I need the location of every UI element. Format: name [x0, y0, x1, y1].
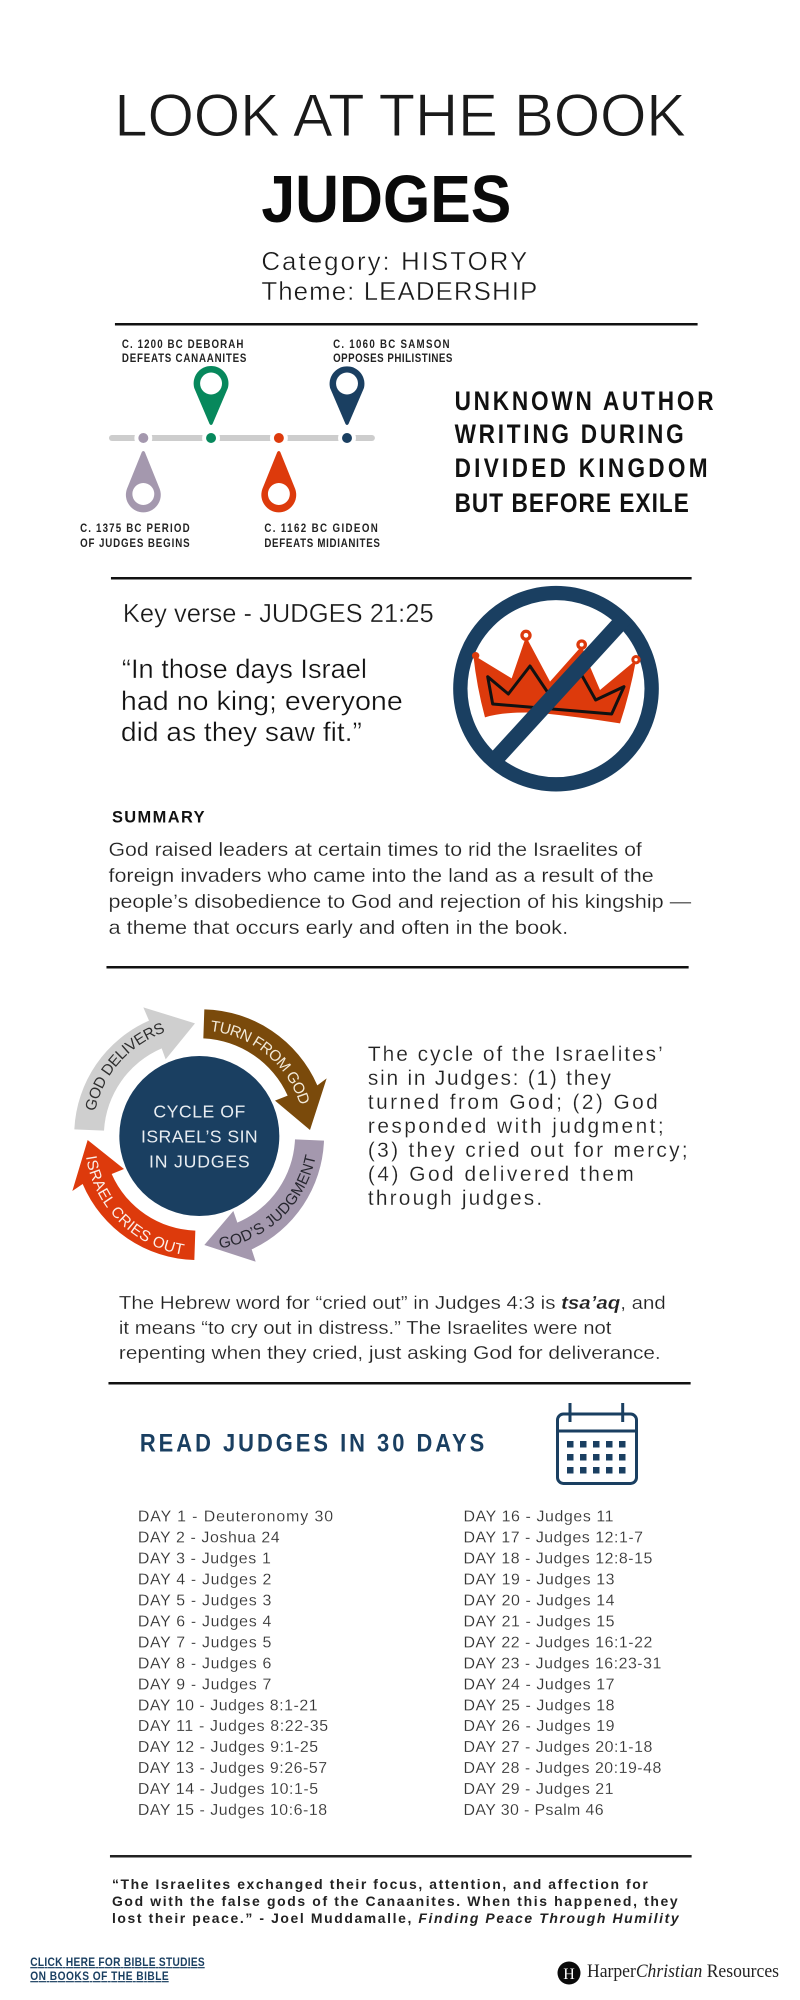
- label: 1060 BC: C. 1060 BC SAMSON: [333, 338, 450, 351]
- list: reading plan days 1-15: DAY 2 - Joshua 24: [138, 1530, 280, 1547]
- arrow: God delivers: GOD DELIVERS: [86, 1023, 164, 1110]
- text: author and date: [455, 386, 714, 519]
- text: Hebrew word note: The Hebrew word for “cried out” in Judges 4:3 is tsa’aq , and: [119, 1292, 666, 1313]
- list: reading plan days 16-30: DAY 23 - Judges 16:23-31: [464, 1655, 661, 1672]
- label: 1162 BC: [264, 522, 380, 550]
- arrow: God's judgment: [204, 1139, 324, 1262]
- list: reading plan days 1-15: DAY 4 - Judges 2: [138, 1572, 271, 1589]
- text: verse quote: did as they saw fit.”: [121, 717, 362, 747]
- logo: HarperChristian Resources: HarperChristian Resources: [587, 1961, 779, 1982]
- list: reading plan days 1-15: DAY 9 - Judges 7: [138, 1676, 271, 1693]
- logo: HarperChristian Resources: H: [563, 1966, 575, 1983]
- list: reading plan days 16-30: DAY 20 - Judges 14: [464, 1592, 615, 1610]
- list: reading plan days 16-30: DAY 17 - Judges 12:1-7: [464, 1530, 643, 1547]
- arrow: God delivers: [74, 1008, 195, 1131]
- list: reading plan days 1-15: DAY 13 - Judges 9:26-57: [138, 1760, 327, 1777]
- center circle: ISRAEL’S SIN: [141, 1127, 258, 1147]
- label: 1375 BC: [80, 522, 190, 550]
- icon: purple pin: [126, 451, 161, 512]
- text: Hebrew word note: it means “to cry out in distress.” The Israelites were not: [119, 1317, 611, 1338]
- timeline bar: [112, 429, 372, 447]
- list: reading plan days 1-15: DAY 5 - Judges 3: [138, 1592, 271, 1610]
- label: 1162 BC: DEFEATS MIDIANITES: [264, 537, 380, 550]
- text: summary body: God raised leaders at certain times to rid the Israelites of: [108, 840, 643, 861]
- list: reading plan days 1-15: DAY 12 - Judges 9:1-25: [138, 1739, 318, 1756]
- center circle: IN JUDGES: [149, 1152, 250, 1172]
- text: cycle description: (3) they cried out for mercy;: [368, 1139, 688, 1162]
- arrow: Israel cries out: ISRAEL CRIES OUT: [86, 1156, 185, 1254]
- center circle: CYCLE OF: [153, 1102, 246, 1122]
- label: 1200 BC: C. 1200 BC DEBORAH: [122, 338, 243, 351]
- panel: timeline: [80, 338, 452, 550]
- text: Hebrew word note: [119, 1292, 666, 1363]
- list: reading plan days 16-30: DAY 18 - Judges 12:8-15: [464, 1551, 653, 1568]
- text: closing quote: lost their peace.” - Joel Muddamalle, Finding Peace Through Humility: [112, 1910, 680, 1926]
- text: verse quote: [121, 654, 403, 747]
- list: reading plan days 1-15: DAY 11 - Judges 8:22-35: [138, 1718, 328, 1735]
- text: category and theme: [261, 248, 537, 306]
- text: closing quote: “The Israelites exchanged their focus, attention, and affection for: [112, 1876, 648, 1892]
- title: look at the book: LOOK AT THE BOOK: [114, 82, 686, 149]
- icon: navy pin: [330, 366, 364, 425]
- list: reading plan days 16-30: [464, 1509, 661, 1819]
- list: reading plan days 1-15: DAY 3 - Judges 1: [138, 1551, 271, 1568]
- text: author and date: WRITING DURING: [455, 419, 684, 450]
- list: reading plan days 16-30: DAY 28 - Judges 20:19-48: [464, 1760, 661, 1777]
- icon: crossed-out crown: [460, 593, 652, 784]
- heading: key verse: Key verse - JUDGES 21:25: [123, 600, 434, 628]
- text: summary body: foreign invaders who came into the land as a result of the: [108, 866, 654, 887]
- list: reading plan days 1-15: DAY 6 - Judges 4: [138, 1613, 271, 1631]
- heading: summary: SUMMARY: [112, 809, 205, 827]
- list: reading plan days 1-15: DAY 10 - Judges 8:1-21: [138, 1697, 318, 1714]
- heading: read Judges in 30 days: READ JUDGES IN 30 DAYS: [140, 1429, 484, 1457]
- list: reading plan days 16-30: DAY 25 - Judges 18: [464, 1697, 615, 1714]
- label: 1375 BC: OF JUDGES BEGINS: [80, 537, 190, 550]
- arrow: God's judgment: GOD’S JUDGMENT: [220, 1154, 315, 1248]
- list: reading plan days 16-30: DAY 30 - Psalm 46: [464, 1802, 604, 1819]
- text: author and date: BUT BEFORE EXILE: [455, 488, 689, 519]
- heading: judges: JUDGES: [261, 162, 511, 237]
- text: cycle description: The cycle of the Israelites’: [368, 1043, 663, 1066]
- list: reading plan days 16-30: DAY 29 - Judges 21: [464, 1781, 614, 1798]
- text: closing quote: God with the false gods of the Canaanites. When this happened, they: [112, 1893, 678, 1909]
- label: 1200 BC: [122, 338, 246, 365]
- label: 1200 BC: DEFEATS CANAANITES: [122, 352, 246, 365]
- list: reading plan days 16-30: DAY 22 - Judges 16:1-22: [464, 1634, 653, 1651]
- text: verse quote: had no king; everyone: [121, 686, 403, 716]
- text: cycle description: (4) God delivered them: [368, 1163, 634, 1186]
- list: reading plan days 16-30: DAY 27 - Judges 20:1-18: [464, 1739, 653, 1756]
- chart: cycle of Israel's sin: [72, 1008, 327, 1262]
- text: summary body: people’s disobedience to God and rejection of his kingship —: [108, 892, 691, 913]
- link: Bible studies: [30, 1956, 205, 1983]
- icon: orange pin: [261, 451, 296, 512]
- label: 1375 BC: C. 1375 BC PERIOD: [80, 522, 190, 535]
- label: 1162 BC: C. 1162 BC GIDEON: [264, 522, 378, 535]
- arrow: turn from God: TURN FROM GOD: [212, 1020, 309, 1104]
- text: verse quote: “In those days Israel: [122, 654, 367, 684]
- list: reading plan days 16-30: DAY 19 - Judges 13: [464, 1572, 615, 1589]
- list: reading plan days 16-30: DAY 26 - Judges 19: [464, 1718, 615, 1735]
- text: Hebrew word note: repenting when they cried, just asking God for deliverance.: [119, 1342, 661, 1363]
- text: cycle description: sin in Judges: (1) they: [368, 1067, 611, 1090]
- text: author and date: UNKNOWN AUTHOR: [455, 386, 714, 417]
- list: reading plan days 1-15: DAY 1 - Deuteronomy 30: [138, 1509, 333, 1526]
- text: author and date: DIVIDED KINGDOM: [455, 453, 708, 484]
- link: Bible studies: ON BOOKS OF THE BIBLE: [30, 1970, 169, 1983]
- list: reading plan days 1-15: DAY 15 - Judges 10:6-18: [138, 1802, 327, 1819]
- link: Bible studies: CLICK HERE FOR BIBLE STUDIES: [30, 1956, 205, 1969]
- list: reading plan days 1-15: [138, 1509, 333, 1819]
- icon: green pin: [194, 366, 228, 425]
- list: reading plan days 16-30: DAY 24 - Judges 17: [464, 1676, 615, 1693]
- center circle: [119, 1056, 279, 1216]
- text: category and theme: Theme: LEADERSHIP: [261, 278, 537, 306]
- text: category and theme: Category: HISTORY: [261, 248, 527, 276]
- text: cycle description: responded with judgment;: [368, 1115, 664, 1138]
- text: cycle description: [368, 1043, 688, 1210]
- list: reading plan days 16-30: DAY 16 - Judges 11: [464, 1509, 614, 1526]
- icon: calendar: [557, 1403, 637, 1484]
- label: 1060 BC: [333, 338, 452, 365]
- text: cycle description: through judges.: [368, 1187, 542, 1210]
- text: summary body: a theme that occurs early and often in the book.: [108, 918, 568, 939]
- list: reading plan days 1-15: DAY 14 - Judges 10:1-5: [138, 1781, 318, 1798]
- list: reading plan days 1-15: DAY 7 - Judges 5: [138, 1634, 271, 1651]
- text: cycle description: turned from God; (2) God: [368, 1091, 658, 1114]
- text: closing quote: [112, 1876, 680, 1926]
- text: summary body: [108, 840, 691, 939]
- arrow: turn from God: [203, 1009, 327, 1130]
- list: reading plan days 16-30: DAY 21 - Judges 15: [464, 1613, 615, 1631]
- label: 1060 BC: OPPOSES PHILISTINES: [333, 352, 452, 365]
- list: reading plan days 1-15: DAY 8 - Judges 6: [138, 1655, 271, 1672]
